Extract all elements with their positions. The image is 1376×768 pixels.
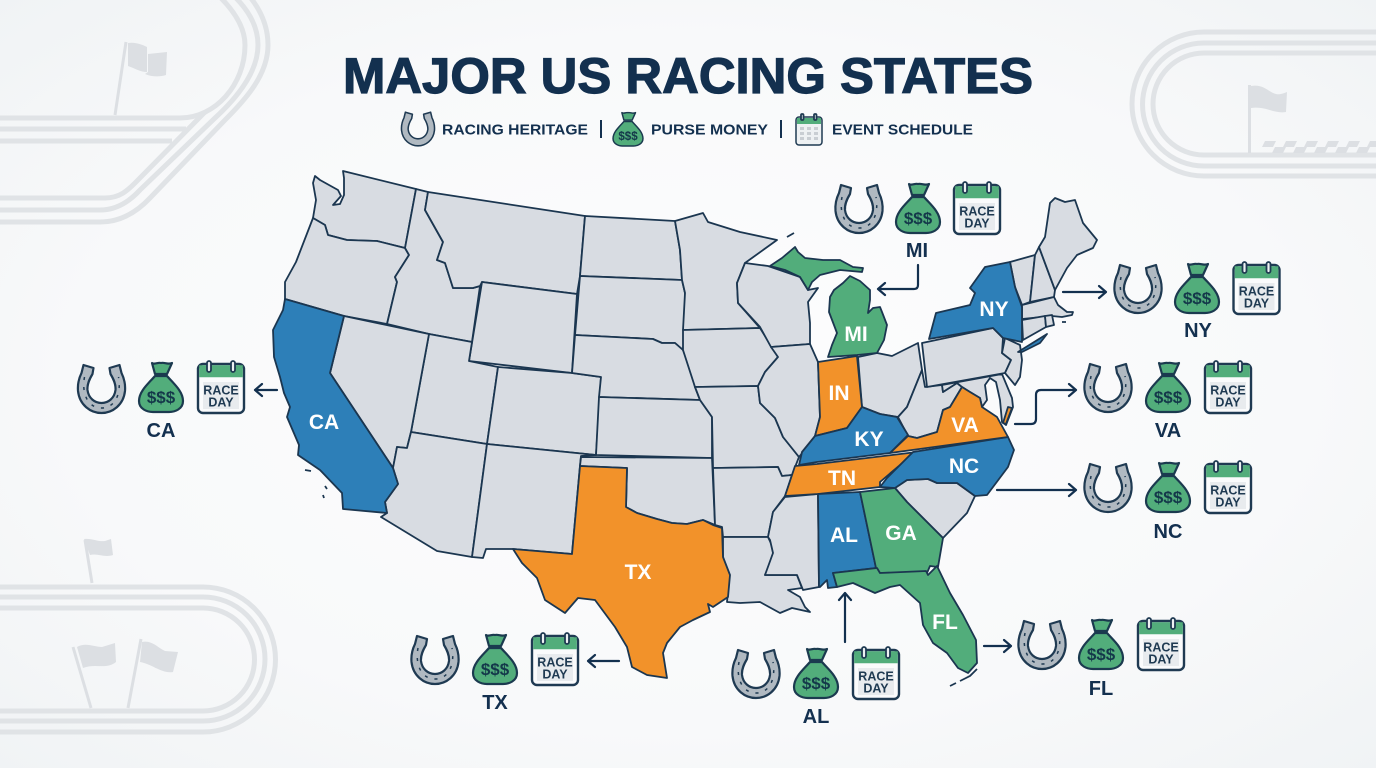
icon: race day calendar: DAY xyxy=(1148,652,1174,666)
state: California xyxy=(273,299,398,513)
icon: horseshoe xyxy=(1084,464,1132,512)
state: California: CA xyxy=(309,411,339,434)
legend item: racing heritage: RACING HERITAGE xyxy=(442,122,588,138)
arrow: MI xyxy=(878,265,918,295)
icon: race day calendar: DAY xyxy=(208,396,234,410)
callout: VA xyxy=(1084,361,1251,442)
icon: money bag xyxy=(1146,363,1190,412)
state: Michigan xyxy=(770,247,887,357)
icon: race day calendar xyxy=(1205,461,1251,513)
icon: money bag: $$$ xyxy=(802,674,831,693)
icon: race day calendar: RACE xyxy=(959,204,995,218)
state: New York: NY xyxy=(979,298,1009,321)
icon: race day calendar xyxy=(853,647,899,699)
state: New York xyxy=(929,262,1047,352)
callout: NC xyxy=(1084,461,1251,543)
state: Virginia xyxy=(890,387,1012,453)
icon: horseshoe xyxy=(1018,621,1066,669)
map of US states xyxy=(273,171,1097,686)
icon: horseshoe xyxy=(835,185,883,233)
legend item: purse money: PURSE MONEY xyxy=(651,122,768,138)
legend item: event schedule: EVENT SCHEDULE xyxy=(832,122,973,138)
icon: money bag: $$$ xyxy=(1087,645,1116,664)
icon: money bag xyxy=(896,184,940,233)
icon: money bag: $$$ xyxy=(147,388,176,407)
icon: race day calendar: RACE xyxy=(1210,484,1246,498)
icon: race day calendar: DAY xyxy=(1244,296,1270,310)
legend item: event schedule xyxy=(796,114,973,145)
label: CA: CA xyxy=(147,420,175,442)
callout: TX xyxy=(411,633,578,714)
state: Texas xyxy=(513,466,730,678)
icon: race day calendar xyxy=(1205,361,1251,413)
background track: bottom left xyxy=(0,539,276,732)
icon: race day calendar: DAY xyxy=(1215,496,1241,510)
icon: horseshoe xyxy=(78,365,125,413)
icon: money bag xyxy=(794,649,838,698)
arrow: NY xyxy=(1063,286,1106,298)
icon: race day calendar: DAY xyxy=(1215,396,1241,410)
icon: money bag xyxy=(473,635,517,684)
icon: race day calendar: RACE xyxy=(537,656,573,670)
arrow: FL xyxy=(984,640,1011,652)
state: Kentucky xyxy=(799,407,908,465)
state: Alabama: AL xyxy=(830,524,858,547)
callout: CA xyxy=(78,361,244,442)
state: Texas: TX xyxy=(625,561,651,584)
icon: race day calendar: RACE xyxy=(1239,284,1274,298)
state: North Carolina xyxy=(880,437,1014,496)
icon: race day calendar: RACE xyxy=(203,384,239,398)
icon: race day calendar: DAY xyxy=(964,216,990,230)
arrow: VA xyxy=(1015,384,1076,424)
arrow: NC xyxy=(997,484,1076,496)
label: FL: FL xyxy=(1089,678,1113,700)
icon: race day calendar xyxy=(1234,262,1280,314)
icon: money bag xyxy=(139,363,183,412)
icon: money bag: $$$ xyxy=(1154,388,1183,407)
state: Florida: FL xyxy=(932,611,958,634)
icon: money bag xyxy=(1175,264,1219,313)
label: VA: VA xyxy=(1155,420,1181,442)
icon: race day calendar: RACE xyxy=(858,670,894,684)
label: TX: TX xyxy=(482,692,508,714)
state: Kentucky: KY xyxy=(854,428,884,451)
state: Tennessee: TN xyxy=(828,467,856,490)
state: Virginia: VA xyxy=(951,414,979,437)
icon: money bag: $$$ xyxy=(481,660,510,679)
legend item: purse money xyxy=(613,113,768,146)
icon: horseshoe xyxy=(732,650,780,698)
state: North Carolina: NC xyxy=(949,455,979,478)
arrow: TX xyxy=(588,655,619,667)
label: NC: NC xyxy=(1154,521,1182,543)
icon: money bag: $$$ xyxy=(1183,289,1212,308)
state: Georgia: GA xyxy=(885,522,917,545)
state: Michigan: MI xyxy=(844,323,868,346)
state: Alabama xyxy=(818,492,876,588)
callout: NY xyxy=(1114,262,1280,342)
label: MI: MI xyxy=(906,240,928,262)
legend xyxy=(401,112,973,146)
icon: money bag xyxy=(1079,620,1123,669)
callout: MI xyxy=(835,182,1000,262)
callout: FL xyxy=(1018,618,1184,700)
icon: race day calendar: DAY xyxy=(542,668,568,682)
legend item: purse money: $$$ xyxy=(618,131,638,143)
state: Tennessee xyxy=(785,452,917,496)
icon: money bag: $$$ xyxy=(1154,488,1183,507)
icon: money bag: $$$ xyxy=(904,209,933,228)
state: Indiana xyxy=(815,356,862,436)
icon: race day calendar: DAY xyxy=(863,682,889,696)
state: Indiana: IN xyxy=(828,382,850,405)
state: Florida xyxy=(833,566,977,686)
background track: top left xyxy=(0,0,268,222)
label: AL: AL xyxy=(803,706,829,728)
icon: race day calendar xyxy=(198,361,244,413)
background track: top right xyxy=(1132,32,1376,176)
icon: race day calendar xyxy=(1138,618,1184,670)
callout: AL xyxy=(732,647,899,728)
icon: race day calendar xyxy=(954,182,1000,234)
icon: horseshoe xyxy=(1114,265,1162,313)
arrow: CA xyxy=(255,384,277,396)
icon: race day calendar: RACE xyxy=(1210,384,1246,398)
icon: horseshoe xyxy=(1084,364,1132,412)
icon: horseshoe xyxy=(411,636,459,684)
icon: race day calendar: RACE xyxy=(1143,640,1179,654)
icon: money bag xyxy=(1146,463,1190,512)
icon: race day calendar xyxy=(532,633,578,685)
label: NY: NY xyxy=(1184,320,1213,342)
arrow: AL xyxy=(839,593,851,642)
title: MAJOR US RACING STATES xyxy=(343,48,1033,104)
legend item: racing heritage xyxy=(401,112,588,146)
state: Georgia xyxy=(860,488,943,573)
